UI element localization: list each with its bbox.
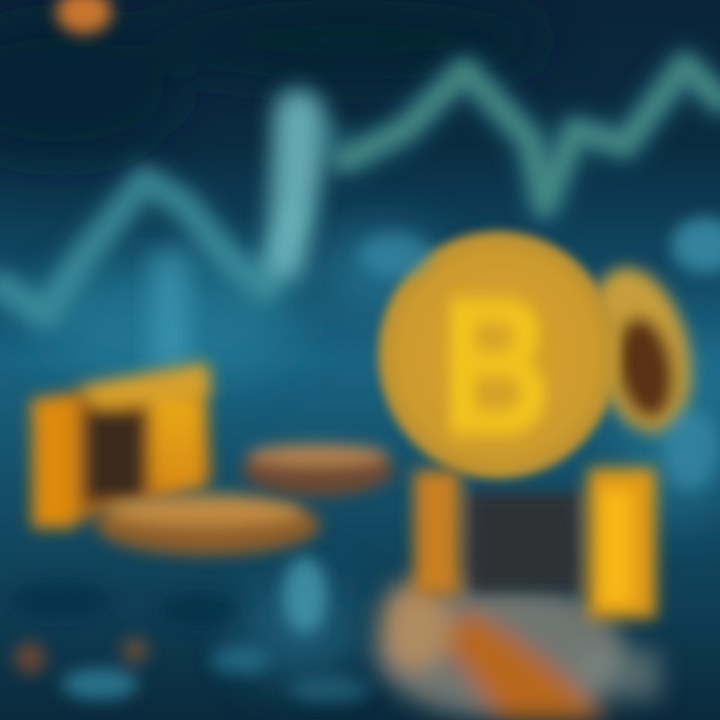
- flat coin: back: [242, 444, 394, 496]
- stack left bar: [32, 398, 76, 528]
- bitcoin symbol: B: [442, 260, 550, 473]
- stack highlight: [600, 490, 632, 605]
- right coin stack under the bitcoin: [414, 468, 656, 618]
- chart line: right section: [345, 65, 720, 205]
- stack right bar: [152, 400, 204, 490]
- light column: [150, 250, 190, 370]
- right glow blob: [671, 217, 720, 273]
- flat coin: front: [96, 494, 320, 555]
- coin edge on the right: [573, 257, 707, 443]
- chart spike: [268, 92, 322, 280]
- stack left column: [414, 470, 460, 595]
- lower right coin reflection: [375, 580, 660, 720]
- stack dark center: [84, 410, 146, 502]
- chart line: left section: [0, 180, 295, 315]
- small bokeh dots: [10, 233, 718, 702]
- chart line: [0, 65, 720, 315]
- left stack of gold coins: [30, 362, 212, 530]
- chart line: soft glow: [0, 65, 720, 315]
- stack dark centre: [468, 492, 580, 592]
- stack right column: [588, 468, 656, 618]
- stack top edge: [80, 362, 212, 408]
- bitcoin coin: [378, 231, 618, 479]
- stack body: [30, 362, 212, 530]
- coin face: [378, 231, 618, 479]
- icon: orange glow top left: [56, 0, 112, 34]
